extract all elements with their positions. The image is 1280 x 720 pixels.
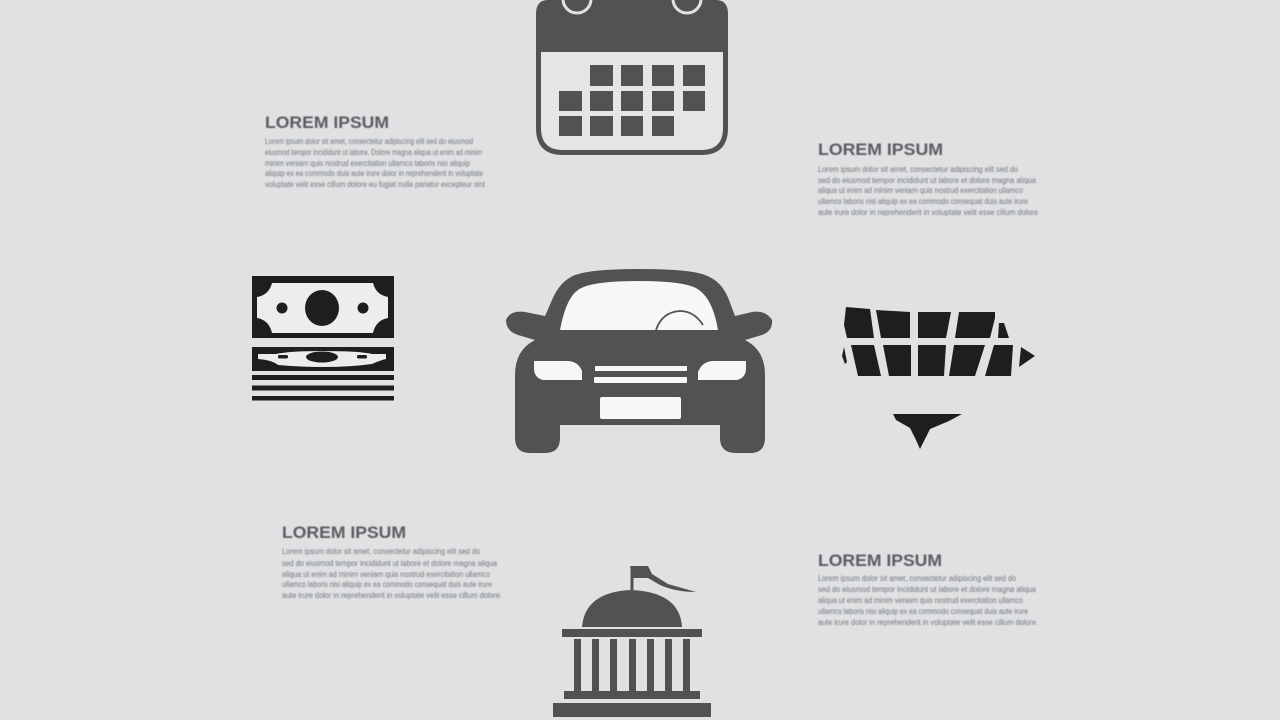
body text: bottom right: aliqua ut enim ad minim veniam quis nostrud exercitation ullamco (818, 596, 1023, 605)
body text: bottom right: ullamco laboris nisi aliquip ex ea commodo consequat duis aute irure (818, 607, 1028, 616)
body text: top right: aliqua ut enim ad minim veniam quis nostrud exercitation ullamco (818, 186, 1023, 195)
body text: top left: minim veniam quis nostrud exercitation ullamco laboris nisi aliquip (265, 159, 470, 168)
body text: top left: eiusmod tempor incididunt ut labore. Dolore magna aliqua ut enim ad minim (265, 148, 482, 157)
body text: bottom right: sed do eiusmod tempor incididunt ut labore et dolore magna aliqua (818, 585, 1037, 594)
icon: grid map shape (842, 307, 1035, 449)
body text: bottom left: ullamco laboris nisi aliquip ex ea commodo consequat duis aute irure (282, 580, 492, 589)
body text: bottom left: aliqua ut enim ad minim veniam quis nostrud exercitation ullamco (282, 570, 490, 579)
body text: bottom left: aute irure dolor in reprehenderit in voluptate velit esse cillum dolore. (282, 591, 502, 600)
body text: top left: aliquip ex ea commodo duis aute irure dolor in reprehenderit in voluptate (265, 169, 483, 178)
icon: car front view (506, 269, 772, 453)
body text: top right: aute irure dolor in reprehenderit in voluptate velit esse cillum dolore (818, 208, 1039, 217)
body text: bottom left: sed do eiusmod tempor incididunt ut labore et dolore magna aliqua (282, 559, 498, 568)
heading: bottom right: LOREM IPSUM (818, 551, 942, 570)
body text: top left: voluptate velit esse cillum dolore eu fugiat nulla pariatur excepteur sint (265, 180, 486, 189)
body text: top left (265, 137, 486, 189)
body text: bottom right (818, 574, 1038, 627)
heading: top left: LOREM IPSUM (265, 113, 389, 132)
icon: government building with flag (553, 566, 711, 717)
text block: top left (265, 113, 486, 189)
body text: top right (818, 165, 1039, 217)
body text: bottom left (282, 547, 502, 600)
text block: bottom left (282, 523, 502, 600)
body text: bottom right: aute irure dolor in reprehenderit in voluptate velit esse cillum dolore. (818, 618, 1038, 627)
body text: bottom right: Lorem ipsum dolor sit amet, consectetur adipiscing elit sed do (818, 574, 1016, 583)
heading: bottom left: LOREM IPSUM (282, 523, 406, 542)
body text: bottom left: Lorem ipsum dolor sit amet, consectetur adipiscing elit sed do (282, 547, 480, 556)
icon: banknote stack (252, 276, 394, 400)
body text: top right: ullamco laboris nisi aliquip ex ea commodo consequat duis aute irure (818, 197, 1028, 206)
body text: top right: sed do eiusmod tempor incididunt ut labore et dolore magna aliqua (818, 176, 1037, 185)
body text: top left: Lorem ipsum dolor sit amet, consectetur adipiscing elit sed do eiusmod (265, 137, 473, 146)
text block: bottom right (818, 551, 1038, 627)
body text: top right: Lorem ipsum dolor sit amet, consectetur adipiscing elit sed do (818, 165, 1018, 174)
text block: top right (818, 140, 1039, 217)
icon: calendar (536, 0, 728, 155)
heading: top right: LOREM IPSUM (818, 140, 943, 159)
